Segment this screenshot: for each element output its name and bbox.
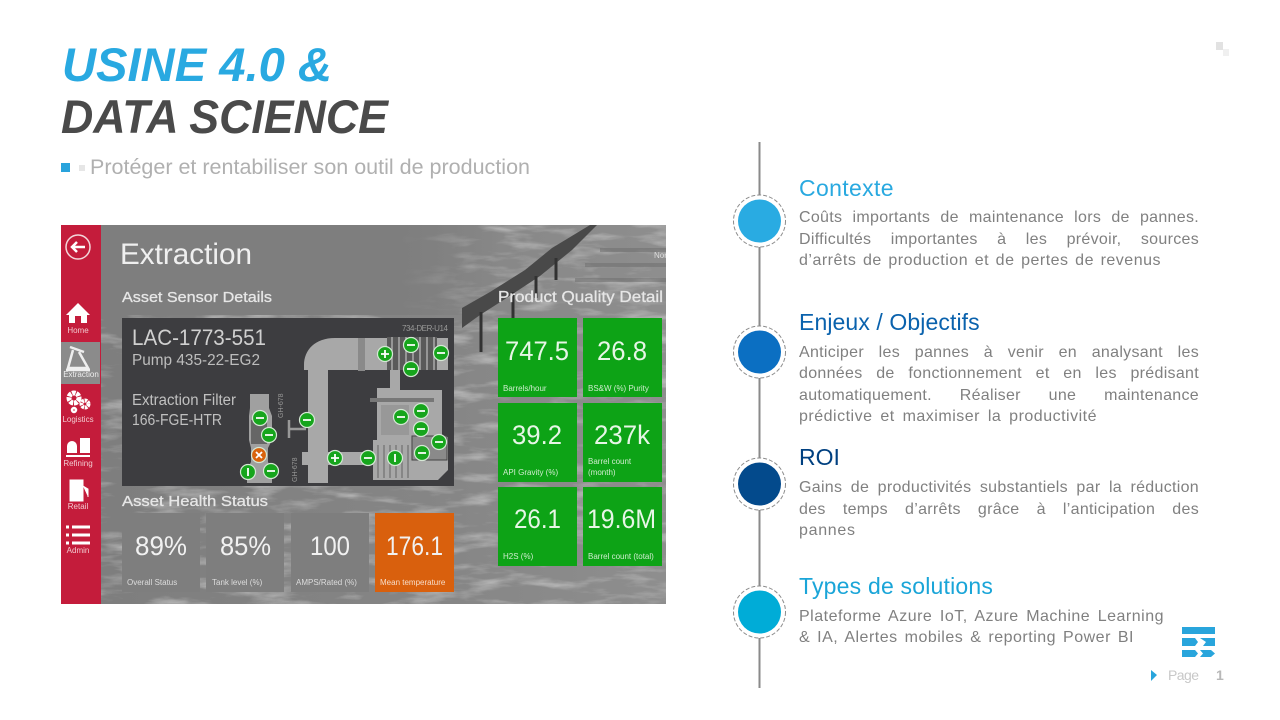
product quality tiles: Barrel count (total) [588, 552, 654, 561]
body: roi: Gains de productivités substantiels par la réduction [799, 479, 1199, 496]
product quality tiles: 26.1 [514, 504, 561, 534]
heading: contexte: Contexte [799, 175, 894, 201]
dashboard headings: Extraction [120, 238, 252, 271]
body: types de solutions: & IA, Alertes mobiles & reporting Power BI [799, 629, 1134, 646]
body: types de solutions: Plateforme Azure IoT, Azure Machine Learning [799, 608, 1164, 625]
dashboard screenshot [61, 225, 667, 604]
product quality tiles: (month) [588, 468, 616, 477]
panel: asset sensor details: GH-678 [292, 457, 299, 482]
page number [1151, 667, 1224, 683]
sidebar labels: Extraction [63, 370, 99, 379]
body: enjeux: prédictive et maximiser la productivité [799, 408, 1097, 425]
body: enjeux: Anticiper les pannes à venir en analysant les [799, 344, 1199, 361]
sidebar labels: Refining [63, 459, 93, 468]
panel: asset sensor details: 734-DER-U14 [402, 324, 449, 333]
panel: asset sensor details: GH-678 [278, 393, 285, 418]
panel: asset sensor details: LAC-1773-551 [132, 325, 266, 350]
icon: home [66, 303, 90, 323]
body: contexte [799, 209, 1199, 269]
product quality tiles [498, 318, 662, 566]
body: contexte: Difficultés importantes à les prévoir, sources [799, 231, 1199, 248]
product quality tiles: API Gravity (%) [503, 468, 558, 477]
icon: admin list [66, 527, 90, 543]
product quality tiles: 26.8 [597, 336, 647, 366]
product quality tiles: Barrels/hour [503, 384, 547, 393]
dashboard headings [120, 238, 667, 510]
body: enjeux [799, 344, 1199, 425]
product quality tiles: 19.6M [587, 504, 656, 534]
subtitle: Protéger et rentabiliser son outil de production [90, 156, 530, 179]
product quality tiles: 747.5 [505, 336, 569, 366]
heading: types de solutions: Types de solutions [799, 573, 993, 599]
sidebar labels: Home [67, 326, 89, 335]
pipe diagram [247, 337, 448, 483]
title [61, 38, 390, 143]
heading: enjeux: Enjeux / Objectifs [799, 309, 980, 335]
sidebar labels: Admin [67, 546, 89, 555]
body: contexte: d’arrêts de production et de pertes de revenus [799, 252, 1161, 269]
timeline node: types de solutions [734, 586, 786, 638]
page number: 1 [1216, 667, 1224, 683]
body: types de solutions [799, 608, 1164, 646]
body: enjeux: automatiquement. Réaliser une maintenance [799, 387, 1199, 404]
product quality tiles: H2S (%) [503, 552, 534, 561]
dashboard headings: Asset Sensor Details [122, 289, 272, 306]
health status tiles: AMPS/Rated (%) [296, 578, 357, 587]
red sidebar [61, 225, 101, 604]
product quality tiles: 39.2 [512, 420, 562, 450]
sidebar labels: Retail [68, 502, 88, 511]
page number: Page [1168, 667, 1199, 683]
text block: types de solutions [799, 573, 1164, 646]
body: roi [799, 479, 1199, 539]
heading: roi: ROI [799, 444, 840, 470]
health status tiles: 176.1 [386, 531, 443, 561]
body: contexte: Coûts importants de maintenance lors de pannes. [799, 209, 1199, 226]
product quality tiles: Barrel count [588, 457, 632, 466]
text block: enjeux [799, 309, 1199, 425]
panel: asset sensor details: 166-FGE-HTR [132, 412, 222, 429]
sidebar labels: Logistics [62, 415, 94, 424]
title: USINE 4.0 & [62, 38, 332, 91]
health status tiles: 100 [310, 531, 350, 561]
health status tiles: 85% [220, 531, 271, 561]
sensor markers [240, 338, 448, 480]
sidebar labels [62, 326, 99, 555]
icon: back arrow [66, 235, 90, 259]
text block: contexte [799, 175, 1199, 269]
panel: asset sensor details: Extraction Filter [132, 392, 236, 409]
health status tiles: Mean temperature [380, 578, 446, 587]
sensor marker glyphs [248, 345, 445, 476]
dashboard headings: Product Quality Detail [498, 289, 663, 306]
health status tiles: Overall Status [127, 578, 177, 587]
title: DATA SCIENCE [61, 90, 390, 143]
product quality tiles: 237k [594, 420, 650, 450]
text block: roi [799, 444, 1199, 539]
panel: asset sensor details: Pump 435-22-EG2 [132, 352, 260, 369]
timeline node: roi [734, 458, 786, 510]
body: enjeux: données de fonctionnement et en les prédisant [799, 365, 1199, 382]
icon: retail pump [70, 480, 88, 501]
timeline node: enjeux [734, 326, 786, 378]
dashboard headings: Asset Health Status [122, 493, 268, 510]
decorative corner squares [1216, 42, 1229, 56]
icon: extraction pump [66, 347, 90, 370]
icon: company logo [1182, 627, 1215, 657]
photo background [61, 225, 666, 604]
panel: asset sensor details [122, 318, 454, 486]
timeline line [758, 142, 760, 688]
product quality tiles: BS&W (%) Purity [588, 384, 649, 393]
icon: logistics gears [69, 393, 88, 412]
dashboard headings: Nor [654, 251, 667, 260]
icon: refining [66, 438, 90, 457]
timeline node: contexte [734, 195, 786, 247]
health status tiles [122, 513, 454, 592]
body: roi: pannes [799, 522, 856, 539]
health status tiles: 89% [135, 531, 187, 561]
health status tiles: Tank level (%) [212, 578, 263, 587]
body: roi: des temps d’arrêts grâce à l’anticipation des [799, 501, 1199, 518]
